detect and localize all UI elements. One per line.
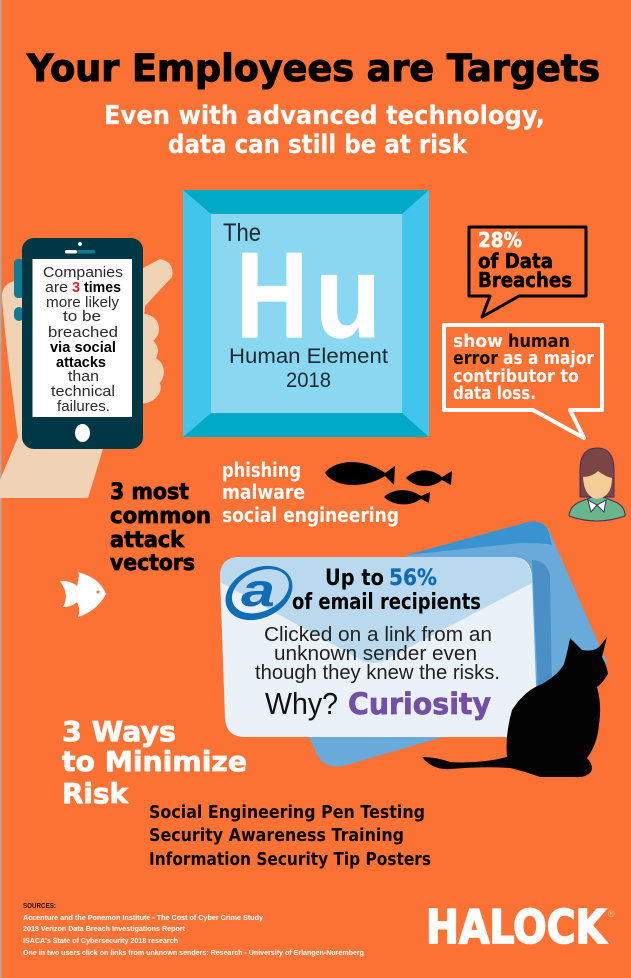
- panel: Hu element tile: H: [236, 227, 308, 363]
- list: attack vectors: social engineering: [222, 503, 399, 527]
- text: sources: [23, 901, 364, 957]
- envelope flap: [220, 557, 532, 663]
- list: ways to minimize risk: Social Engineering Pen Testing: [149, 802, 425, 823]
- text: phone statistic: 3: [72, 279, 80, 296]
- heading: 3 ways to minimize risk: Risk: [62, 777, 129, 810]
- subtitle: [104, 101, 545, 160]
- list: ways to minimize risk: [149, 802, 431, 870]
- icon: white fish: [60, 572, 106, 617]
- text: up to 56%: 56%: [389, 566, 437, 591]
- icon: black cat: [422, 637, 608, 777]
- callout: human error: human: [508, 331, 570, 352]
- text: why curiosity: [265, 686, 491, 721]
- text: sources: Accenture and the Ponemon Institute - The Cost of Cyber Crime Study: [23, 913, 264, 922]
- title: Your Employees are Targets: [26, 47, 600, 90]
- text: phone statistic: [43, 264, 123, 415]
- list: attack vectors: phishing: [222, 458, 301, 482]
- text: sources: 2018 Verizon Data Breach Investigations Report: [23, 924, 185, 933]
- subtitle: Even with advanced technology,: [104, 101, 545, 131]
- icon: hand holding phone: [0, 238, 172, 498]
- text: up to 56%: [292, 566, 481, 615]
- heading: 3 most common attack vectors: 3 most: [110, 480, 189, 505]
- callout: 28% of data breaches: of Data: [478, 249, 553, 273]
- text: sources: One in two users click on links from unknown senders: Research - University of Erlangen-Nuremberg: [23, 948, 364, 957]
- subtitle: data can still be at risk: [168, 130, 468, 160]
- list: ways to minimize risk: Information Security Tip Posters: [149, 849, 431, 870]
- callout: 28% of data breaches: 28%: [478, 228, 522, 252]
- text: up to 56%: Up to: [325, 566, 384, 591]
- text: clicked on a link: Clicked on a link from an: [264, 623, 492, 646]
- heading: 3 most common attack vectors: vectors: [110, 551, 195, 576]
- text: why curiosity: Why?: [265, 686, 338, 721]
- list: ways to minimize risk: Security Awareness Training: [149, 825, 404, 846]
- callout: human error: show: [453, 331, 503, 352]
- text: phone statistic: failures.: [57, 398, 110, 415]
- callout: 28% of data breaches: [469, 227, 586, 317]
- icon: at sign: a: [241, 564, 275, 616]
- text: phone statistic: to be: [63, 308, 101, 325]
- text: sources: SOURCES:: [23, 901, 56, 910]
- callout: human error: as a major: [503, 348, 594, 369]
- panel: Hu element tile: 2018: [286, 369, 331, 392]
- panel: Hu element tile: u: [315, 232, 381, 362]
- heading: 3 ways to minimize risk: 3 Ways: [62, 715, 176, 748]
- icon: at sign: [217, 556, 301, 630]
- logo: HALOCK: HALOCK: [426, 900, 608, 954]
- text: phone statistic: breached: [48, 324, 118, 341]
- text: phone statistic: Companies: [43, 264, 123, 281]
- panel: Hu element tile: [183, 190, 429, 437]
- heading: 3 most common attack vectors: common: [110, 504, 211, 529]
- envelope back: [309, 522, 607, 767]
- text: phone statistic: than: [68, 368, 99, 385]
- text: phone statistic: times: [84, 279, 121, 296]
- text: up to 56%: of email recipients: [292, 590, 481, 615]
- text: clicked on a link: though they knew the risks.: [255, 661, 500, 684]
- callout: human error: contributor to: [453, 366, 579, 387]
- text: phone statistic: are: [45, 279, 68, 296]
- panel: Hu element tile: The: [223, 219, 261, 247]
- callout: 28% of data breaches: Breaches: [478, 268, 572, 292]
- callout: human error: [444, 325, 602, 438]
- text: phone statistic: more likely: [46, 294, 120, 311]
- panel: email envelope: [217, 521, 607, 767]
- list: attack vectors: malware: [222, 480, 305, 504]
- envelope front card: [220, 557, 538, 737]
- icon: black fish school: [325, 462, 452, 504]
- text: phone statistic: attacks: [56, 354, 106, 371]
- panel: Hu element tile: Human Element: [229, 345, 388, 368]
- text: phone statistic: via social: [50, 339, 116, 356]
- text: clicked on a link: [255, 623, 500, 684]
- callout: human error: error: [453, 348, 498, 369]
- heading: 3 ways to minimize risk: to Minimize: [62, 745, 247, 778]
- heading: 3 most common attack vectors: attack: [110, 528, 185, 553]
- heading: 3 most common attack vectors: [110, 480, 211, 576]
- text: why curiosity: Curiosity: [348, 687, 491, 721]
- logo: HALOCK: ®: [608, 909, 615, 919]
- text: clicked on a link: unknown sender even: [274, 642, 477, 665]
- list: attack vectors: [222, 458, 399, 527]
- icon: woman: [569, 448, 625, 521]
- callout: human error: data loss.: [453, 383, 536, 404]
- text: sources: ISACA's State of Cybersecurity 2018 research: [23, 936, 178, 945]
- heading: 3 ways to minimize risk: [62, 715, 247, 810]
- text: phone statistic: technical: [51, 383, 115, 400]
